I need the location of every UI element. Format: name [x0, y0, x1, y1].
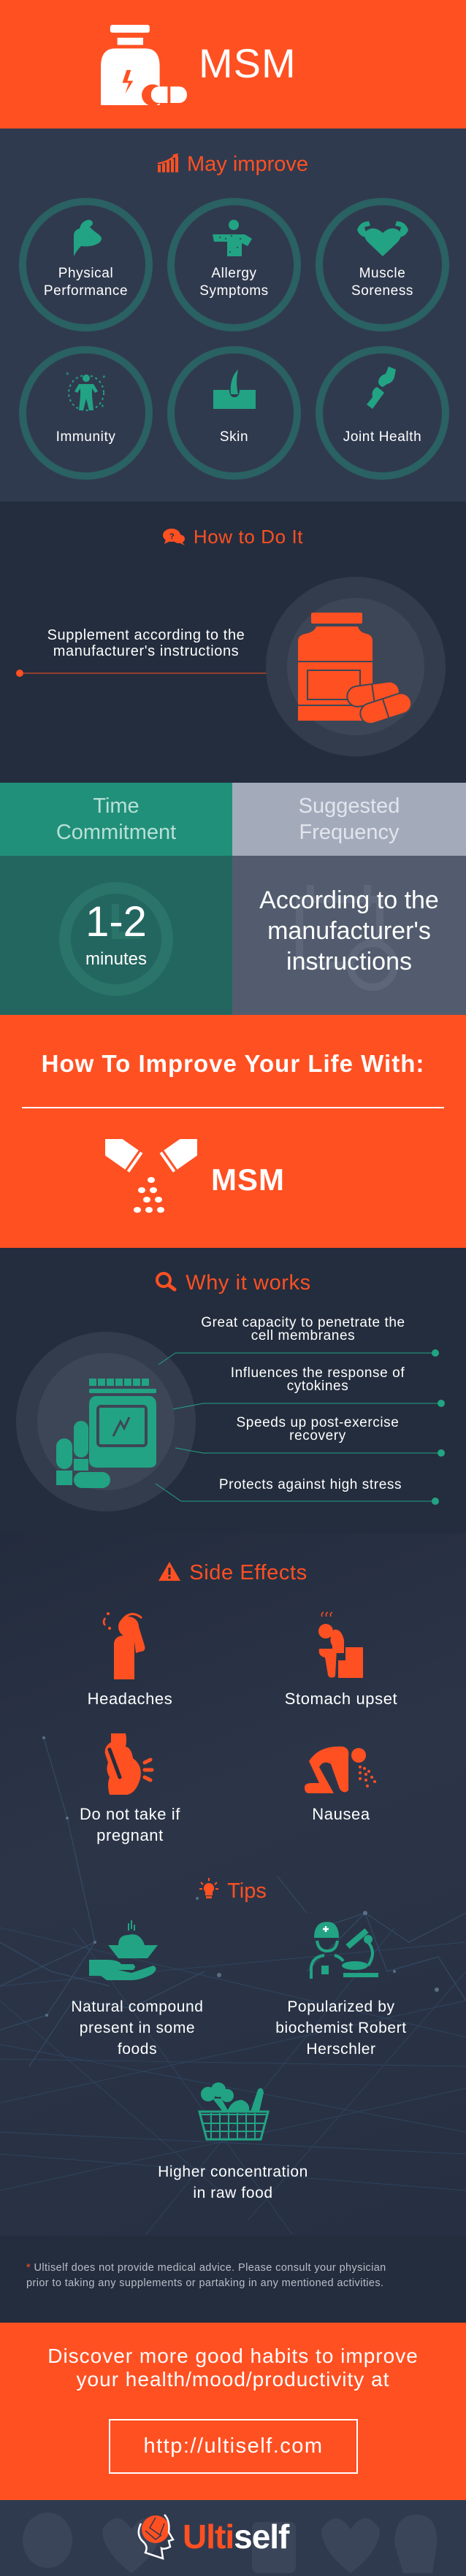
- reason 1: Great capacity to penetrate the: [201, 1315, 405, 1330]
- disclaimer: * Ultiself does not provide medical advice. Please consult your physician: [26, 2262, 386, 2274]
- call to action: [0, 2323, 466, 2500]
- icon: capsules: [105, 1139, 197, 1213]
- panel: suggested frequency: [232, 783, 466, 1015]
- text: supplement instruction: Supplement according to the: [47, 627, 245, 643]
- icon: supplement jar with pills: [16, 1332, 196, 1511]
- tip: natural compound: Natural compound: [71, 1998, 204, 2015]
- tip: higher concentration in raw food: Higher concentration: [158, 2163, 308, 2180]
- header: suggested frequency: Frequency: [299, 821, 399, 844]
- disclaimer: prior to taking any supplements or partaking in any mentioned activities.: [26, 2277, 383, 2289]
- panel: why it works: [0, 1248, 466, 1533]
- text: supplement instruction: manufacturer's instructions: [53, 643, 239, 659]
- benefit: physical performance: Performance: [44, 283, 128, 299]
- heading: how to do it: ?: [169, 532, 175, 541]
- tip: popularized by biochemist: Herschler: [306, 2041, 376, 2058]
- cta text: [47, 2345, 419, 2391]
- value: frequency: [232, 856, 466, 1015]
- heading: tips: Tips: [227, 1879, 267, 1903]
- side effect: stomach upset: [285, 1611, 397, 1708]
- reason 1: cell membranes: [251, 1328, 355, 1343]
- benefit: skin: Skin: [220, 429, 248, 445]
- tip: higher concentration in raw food: [158, 2082, 308, 2201]
- benefit: physical performance: Physical: [58, 266, 113, 281]
- footer background icons: [23, 2512, 437, 2573]
- panel: may improve: [0, 129, 466, 502]
- benefit: allergy symptoms: Allergy: [211, 266, 257, 281]
- logo: ultiself: [137, 2514, 289, 2560]
- tip: popularized by biochemist: Popularized by: [287, 1998, 395, 2015]
- reason 4: Protects against high stress: [219, 1477, 402, 1492]
- connector line: [16, 670, 266, 677]
- panel: side effects and tips background: [0, 1533, 466, 2236]
- cta text: your health/mood/productivity at: [77, 2368, 389, 2391]
- benefit: immunity: *: [102, 373, 106, 383]
- side effect: headaches: [88, 1612, 172, 1708]
- value: frequency: manufacturer's: [267, 917, 431, 945]
- value: 1-2 minutes: 1-2: [85, 898, 147, 946]
- side effect: do not take if pregnant: pregnant: [96, 1826, 164, 1844]
- benefit: physical performance: [19, 198, 153, 331]
- benefit: allergy symptoms: Symptoms: [199, 283, 269, 299]
- side effect: nausea: Nausea: [312, 1805, 370, 1823]
- tip: higher concentration in raw food: in raw food: [193, 2185, 273, 2201]
- benefit: allergy symptoms: [167, 198, 301, 331]
- heading: may improve: May improve: [187, 153, 308, 176]
- tip: popularized by biochemist: biochemist Robert: [275, 2020, 407, 2036]
- text: MSM: MSM: [211, 1162, 285, 1197]
- icon: supplement bottle: [266, 577, 446, 756]
- value: 1-2 minutes: minutes: [85, 949, 147, 969]
- value: 1-2 minutes: [0, 856, 232, 1015]
- heading: side effects: Side Effects: [189, 1561, 308, 1584]
- tip: popularized by biochemist: [275, 1922, 407, 2058]
- side effect: headaches: Headaches: [88, 1690, 172, 1708]
- benefit: immunity: [19, 346, 153, 480]
- benefit: immunity: Immunity: [56, 429, 115, 445]
- logo: ultiself: Ultiself: [183, 2518, 289, 2556]
- title: MSM: [199, 40, 297, 86]
- text: supplement instruction: [47, 627, 245, 659]
- footer: [0, 2500, 466, 2576]
- url button: [109, 2419, 358, 2474]
- benefit: skin: [167, 346, 301, 480]
- url button: http://ultiself.com: [143, 2434, 324, 2458]
- heading: How To Improve Your Life With:: [42, 1050, 424, 1077]
- benefit: muscle soreness: Muscle: [359, 266, 405, 281]
- side effect: do not take if pregnant: [80, 1733, 180, 1844]
- header banner: [0, 0, 466, 129]
- benefit: muscle soreness: [316, 198, 449, 331]
- reason 2: Influences the response of: [231, 1365, 405, 1381]
- tip: natural compound: foods: [118, 2041, 157, 2058]
- cta text: Discover more good habits to improve: [47, 2345, 419, 2367]
- heading: how to do it: How to Do It: [194, 526, 303, 548]
- value: frequency: instructions: [286, 948, 412, 975]
- reason 1: [201, 1315, 405, 1343]
- benefit: muscle soreness: Soreness: [351, 283, 413, 299]
- disclaimer: [0, 2236, 466, 2323]
- side effect: nausea: [305, 1747, 376, 1823]
- reason 3: Speeds up post-exercise: [237, 1415, 399, 1430]
- tip: natural compound: present in some: [80, 2020, 195, 2036]
- reason 3: [237, 1415, 399, 1444]
- icon: supplement jar: [101, 25, 187, 105]
- reason 3: recovery: [289, 1428, 346, 1444]
- header: time commitment: [0, 783, 232, 856]
- header: time commitment: Time: [93, 794, 140, 818]
- header: suggested frequency: Suggested: [299, 794, 400, 818]
- panel: time commitment: [0, 783, 232, 1015]
- reason 2: cytokines: [287, 1379, 348, 1394]
- header: suggested frequency: [232, 783, 466, 856]
- benefit: joint health: [316, 346, 449, 480]
- reason 2: [231, 1365, 405, 1394]
- list: reasons: [155, 1315, 445, 1505]
- panel: how to do it: [0, 502, 466, 783]
- side effect: do not take if pregnant: Do not take if: [80, 1805, 180, 1823]
- panel: how to improve your life: [0, 1015, 466, 1248]
- heading: tips: [199, 1878, 267, 1903]
- header: time commitment: Commitment: [56, 821, 176, 844]
- benefit: joint health: Joint Health: [343, 429, 421, 445]
- tip: natural compound: [71, 1920, 204, 2058]
- side effect: stomach upset: Stomach upset: [285, 1690, 397, 1708]
- value: frequency: According to the: [259, 886, 439, 914]
- heading: why it works: Why it works: [186, 1271, 311, 1295]
